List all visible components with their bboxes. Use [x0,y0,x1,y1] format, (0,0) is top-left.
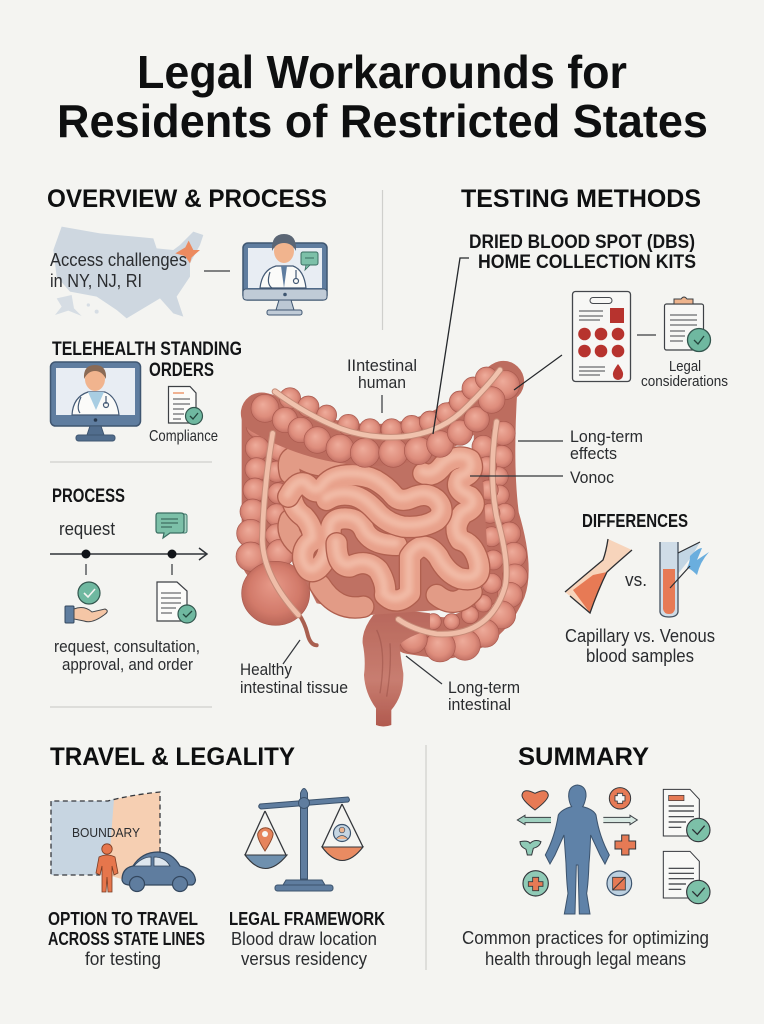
icon: compliance document [168,386,202,424]
heading: process: PROCESS [52,486,125,507]
heading: testing methods: TESTING METHODS [461,185,701,213]
label: long-term intestinal [406,656,520,714]
text: summary caption [462,928,709,969]
label: vonoc: Vonoc [570,468,614,487]
heading: dried blood spot kits [469,232,696,273]
icon: clipboard with check [664,297,710,352]
icon: human figure with health symbols [517,785,637,914]
vs label: vs. [625,570,647,590]
ascending colon and cecum [236,411,310,625]
heading: overview and process: OVERVIEW & PROCESS [47,185,327,213]
label: healthy intestinal tissue [240,640,348,697]
icon: check in hand [65,582,107,623]
text: option to travel: ACROSS STATE LINES [48,929,205,949]
text: summary caption: health through legal means [485,949,686,969]
timeline arrow [50,548,207,575]
icon: summary documents [663,789,710,904]
title [57,46,708,147]
connector [204,270,230,272]
bottom document [663,851,710,904]
text: legal framework [229,909,385,969]
heart [522,791,548,810]
caption: capillary vs venous: blood samples [586,646,694,666]
icon: capillary skin sample [565,539,632,613]
icon: doctor on large monitor [50,362,140,441]
left arrow [517,815,551,825]
heading: telehealth standing orders [52,339,242,381]
label: long-term effects: Long-term [570,427,643,446]
plus circle [609,788,631,809]
connector [637,334,656,336]
map label: Access challenges [50,250,187,270]
panel: process [50,486,207,674]
illustration: human intestines [236,367,528,726]
text: summary caption: Common practices for optimizing [462,928,709,948]
text: option to travel: for testing [85,949,161,969]
label: legal considerations [641,358,728,390]
colon muscle bands [262,370,506,634]
icon: US map with highlighted north-east [53,227,203,318]
process caption: request, consultation, [54,637,200,656]
caption: capillary vs venous: Capillary vs. Venous [565,626,715,646]
label: healthy intestinal tissue: intestinal tissue [240,678,348,697]
label: legal considerations: Legal [669,358,701,375]
appendix [298,613,317,645]
label: long-term effects: effects [570,444,617,463]
blue circle square [607,871,632,896]
teal circle plus [523,871,548,896]
icon: document with check [157,582,196,623]
heading: dried blood spot kits: DRIED BLOOD SPOT (DBS) [469,232,695,253]
heading: dried blood spot kits: HOME COLLECTION KITS [478,252,696,273]
text: option to travel [48,909,205,969]
compliance label: Compliance [149,428,218,445]
text: option to travel: OPTION TO TRAVEL [48,909,198,929]
map label [50,250,187,291]
icon: state boundary with person and car: BOUNDARY [72,825,140,840]
icon: chat bubble [156,513,187,538]
small intestine backing [285,450,488,615]
text: legal framework: versus residency [241,949,367,969]
icon: scales of justice [245,788,363,891]
teal shape [520,840,541,855]
descending colon [399,421,528,662]
step label: request [59,519,115,539]
icon: doctor on monitor [243,234,327,315]
process caption [54,637,200,674]
transverse colon backing [262,382,503,445]
colon backing [265,387,508,638]
heading: differences: DIFFERENCES [582,511,688,531]
icon: dried blood spot card [572,292,630,382]
heading: travel and legality: TRAVEL & LEGALITY [50,743,295,771]
label: intestinal human [347,356,417,413]
right arrow [603,815,637,825]
process caption: approval, and order [62,655,193,674]
heading: telehealth standing orders: ORDERS [149,360,214,381]
label: healthy intestinal tissue: Healthy [240,660,292,679]
pointer: kit card to colon [514,355,562,390]
label: intestinal human: human [358,373,406,392]
body figure [545,785,609,914]
small intestine loops [287,456,479,607]
label: long-term intestinal: Long-term [448,678,520,697]
label: legal considerations: considerations [641,373,728,390]
label: long-term intestinal: intestinal [448,695,511,714]
label: long-term effects [518,427,643,463]
text: legal framework: LEGAL FRAMEWORK [229,909,385,929]
icon: venous blood tube [660,542,709,617]
heading: summary: SUMMARY [518,743,649,771]
icon: state boundary with person and car [51,792,196,892]
orange plus [615,835,636,855]
pointer: DBS kits to colon [433,258,469,434]
map label: in NY, NJ, RI [50,271,142,291]
text: legal framework: Blood draw location [231,929,377,949]
title: Residents of Restricted States [57,95,708,147]
heading: telehealth standing orders: TELEHEALTH STANDING [52,339,242,360]
transverse colon [251,367,520,467]
title: Legal Workarounds for [137,46,627,98]
label: intestinal human: IIntestinal [347,356,417,375]
rectum [363,611,430,726]
top document [663,789,710,842]
caption: capillary vs venous [565,626,715,666]
